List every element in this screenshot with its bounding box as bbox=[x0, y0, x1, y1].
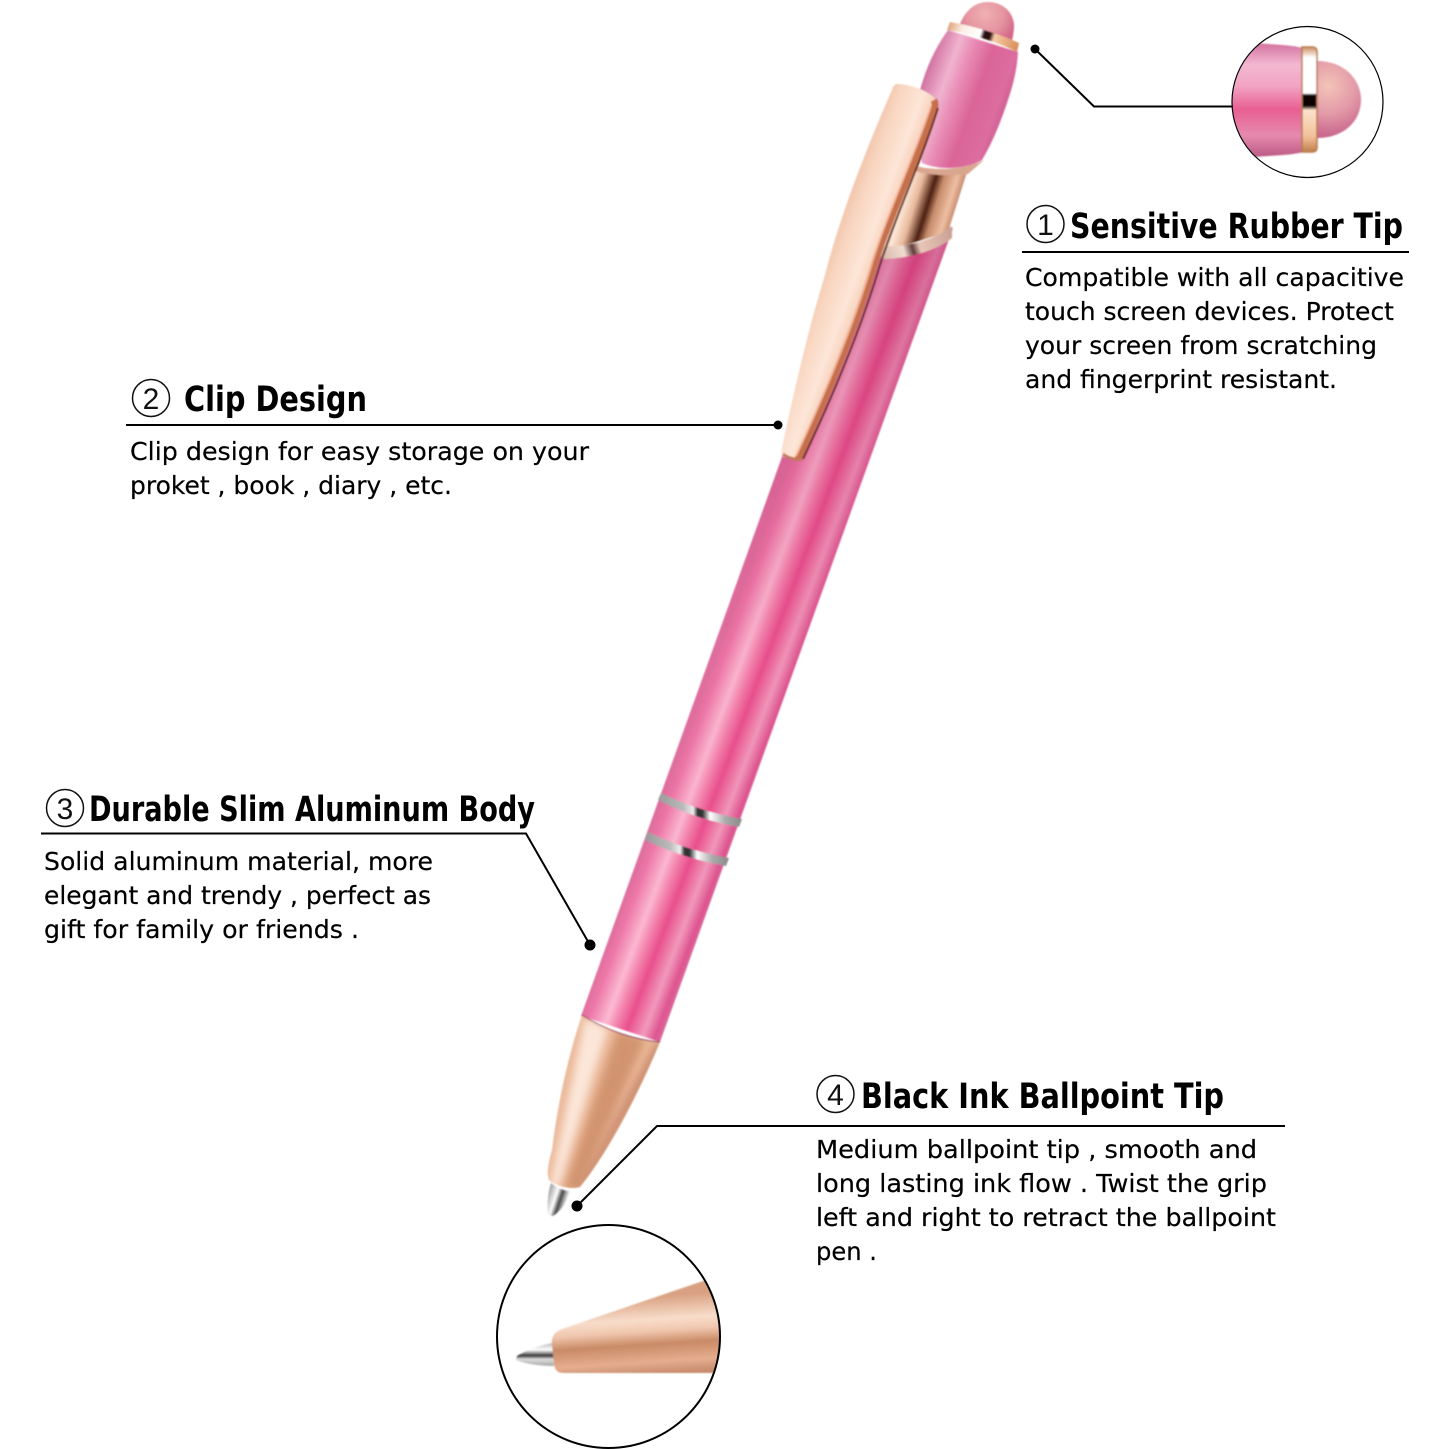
zoom: ink tip bbox=[516, 1343, 554, 1366]
pen: clip bbox=[781, 84, 938, 460]
zoom: dome bbox=[1317, 61, 1361, 138]
text block 1 bbox=[1025, 263, 1404, 394]
zoom: copper cone bbox=[552, 1276, 730, 1373]
heading 2: Clip Design bbox=[184, 380, 367, 420]
pen: ballpoint refill tip bbox=[548, 1183, 570, 1216]
text block 4: long lasting ink flow . Twist the grip bbox=[816, 1169, 1267, 1198]
text block 4 bbox=[816, 1135, 1276, 1266]
text block 3: elegant and trendy , perfect as bbox=[44, 881, 431, 910]
pen: neck rim bbox=[908, 160, 984, 175]
pen: metal cone bbox=[546, 1015, 660, 1189]
heading 2: 2 bbox=[143, 383, 159, 416]
heading 4: 4 bbox=[827, 1079, 844, 1112]
text block 3 bbox=[44, 847, 433, 944]
text block 2: proket , book , diary , etc. bbox=[130, 471, 452, 500]
divider 1 bbox=[1022, 251, 1409, 253]
heading 1: 1 bbox=[1037, 209, 1054, 242]
text block 1: your screen from scratching bbox=[1025, 331, 1377, 360]
zoom circle: rubber tip bbox=[1225, 26, 1383, 178]
zoom: pink cap bbox=[1232, 42, 1302, 158]
zoom: ring bbox=[1302, 47, 1317, 152]
text block 3: Solid aluminum material, more bbox=[44, 847, 433, 876]
pen: aluminum body bbox=[581, 228, 953, 1042]
heading 3: Durable Slim Aluminum Body bbox=[89, 790, 535, 830]
pen: rubber stylus tip bbox=[960, 2, 1014, 44]
callout 4: leader line bbox=[572, 1126, 1285, 1212]
pen: metal neck bbox=[883, 167, 967, 252]
text block 4: Medium ballpoint tip , smooth and bbox=[816, 1135, 1257, 1164]
heading 4: Black Ink Ballpoint Tip bbox=[861, 1077, 1224, 1117]
pen illustration bbox=[540, 2, 1019, 1216]
text block 1: touch screen devices. Protect bbox=[1025, 297, 1394, 326]
callout 1: leader line bbox=[1030, 44, 1233, 106]
pen: collar ring bbox=[881, 226, 952, 259]
pen: silver band upper bbox=[658, 793, 742, 827]
text block 2 bbox=[130, 437, 590, 500]
text block 4: pen . bbox=[816, 1237, 877, 1266]
text block 2: Clip design for easy storage on your bbox=[130, 437, 590, 466]
pen: upper cap bbox=[918, 30, 1018, 168]
zoom circle: ballpoint tip bbox=[497, 1225, 730, 1448]
text block 1: and fingerprint resistant. bbox=[1025, 365, 1337, 394]
callout 2: leader line bbox=[126, 420, 782, 430]
pen: silver band lower bbox=[645, 832, 729, 866]
text block 4: left and right to retract the ballpoint bbox=[816, 1203, 1276, 1232]
pen: cone seam bbox=[582, 1015, 660, 1042]
pen: cap rim bbox=[947, 22, 1019, 52]
text block 3: gift for family or friends . bbox=[44, 915, 359, 944]
text block 1: Compatible with all capacitive bbox=[1025, 263, 1404, 292]
heading 3: 3 bbox=[57, 793, 73, 826]
callout 3: leader line bbox=[41, 834, 596, 950]
heading 1: Sensitive Rubber Tip bbox=[1070, 207, 1403, 247]
